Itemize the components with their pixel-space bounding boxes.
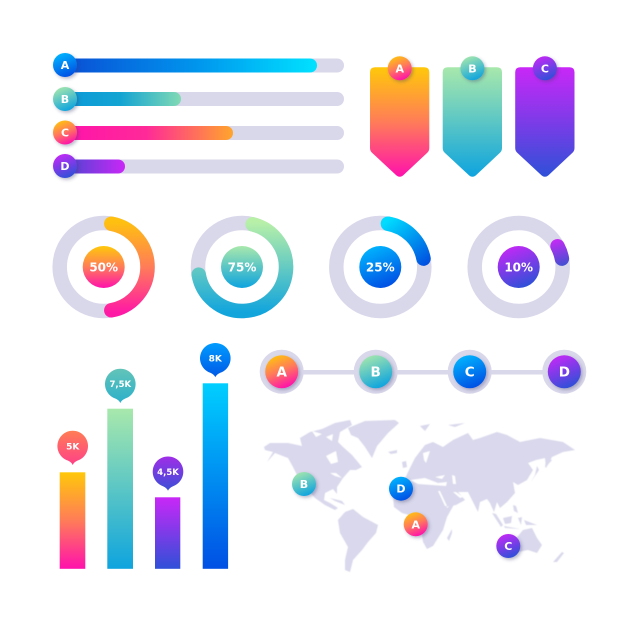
panel: donut charts xyxy=(60,223,563,311)
marker B: B xyxy=(300,478,308,491)
node C xyxy=(448,350,492,394)
donut 10%: 10% xyxy=(504,260,533,274)
panel: timeline xyxy=(260,350,586,394)
marker B xyxy=(292,472,316,496)
donut 75%: 75% xyxy=(228,260,256,274)
column 8K: 8K xyxy=(209,355,223,365)
tag B xyxy=(443,56,502,177)
marker C xyxy=(496,534,520,558)
tag A: A xyxy=(395,62,404,75)
tag A xyxy=(370,56,429,177)
column 7,5K xyxy=(105,369,136,569)
column 8K xyxy=(200,343,231,569)
bar A xyxy=(53,53,344,77)
donut 50%: 50% xyxy=(89,260,118,274)
node C: C xyxy=(465,365,475,381)
node A: A xyxy=(276,365,287,381)
panel: world map xyxy=(264,420,575,572)
donut 25%: 25% xyxy=(366,260,395,274)
column 4,5K: 4,5K xyxy=(157,468,179,478)
panel: arrow tags xyxy=(370,56,574,177)
node D: D xyxy=(559,365,570,381)
panel: column chart xyxy=(57,343,231,569)
tag C: C xyxy=(541,62,549,75)
bar C xyxy=(53,120,344,144)
column 5K xyxy=(57,431,88,569)
marker D xyxy=(389,477,413,501)
marker A xyxy=(404,512,428,536)
bar D: D xyxy=(60,160,70,173)
marker D: D xyxy=(396,483,406,496)
donut 10% xyxy=(475,223,563,311)
donut 75% xyxy=(198,223,286,311)
map landmasses xyxy=(264,420,575,572)
bar D xyxy=(53,154,344,178)
marker C: C xyxy=(504,540,512,553)
column 4,5K xyxy=(153,456,183,569)
bar B: B xyxy=(61,93,69,106)
bar B xyxy=(53,87,344,111)
tag B: B xyxy=(468,62,477,75)
donut 50% xyxy=(60,223,148,311)
node B xyxy=(354,350,398,394)
panel: progress bars xyxy=(53,53,344,178)
column 7,5K: 7,5K xyxy=(109,380,132,390)
tag C xyxy=(515,56,574,177)
bar C: C xyxy=(61,126,69,140)
marker A: A xyxy=(411,518,420,531)
node B: B xyxy=(371,365,381,381)
node A xyxy=(260,350,304,394)
column 5K: 5K xyxy=(66,442,80,452)
donut 25% xyxy=(336,223,424,311)
bar A: A xyxy=(61,59,70,72)
node D xyxy=(542,350,586,394)
